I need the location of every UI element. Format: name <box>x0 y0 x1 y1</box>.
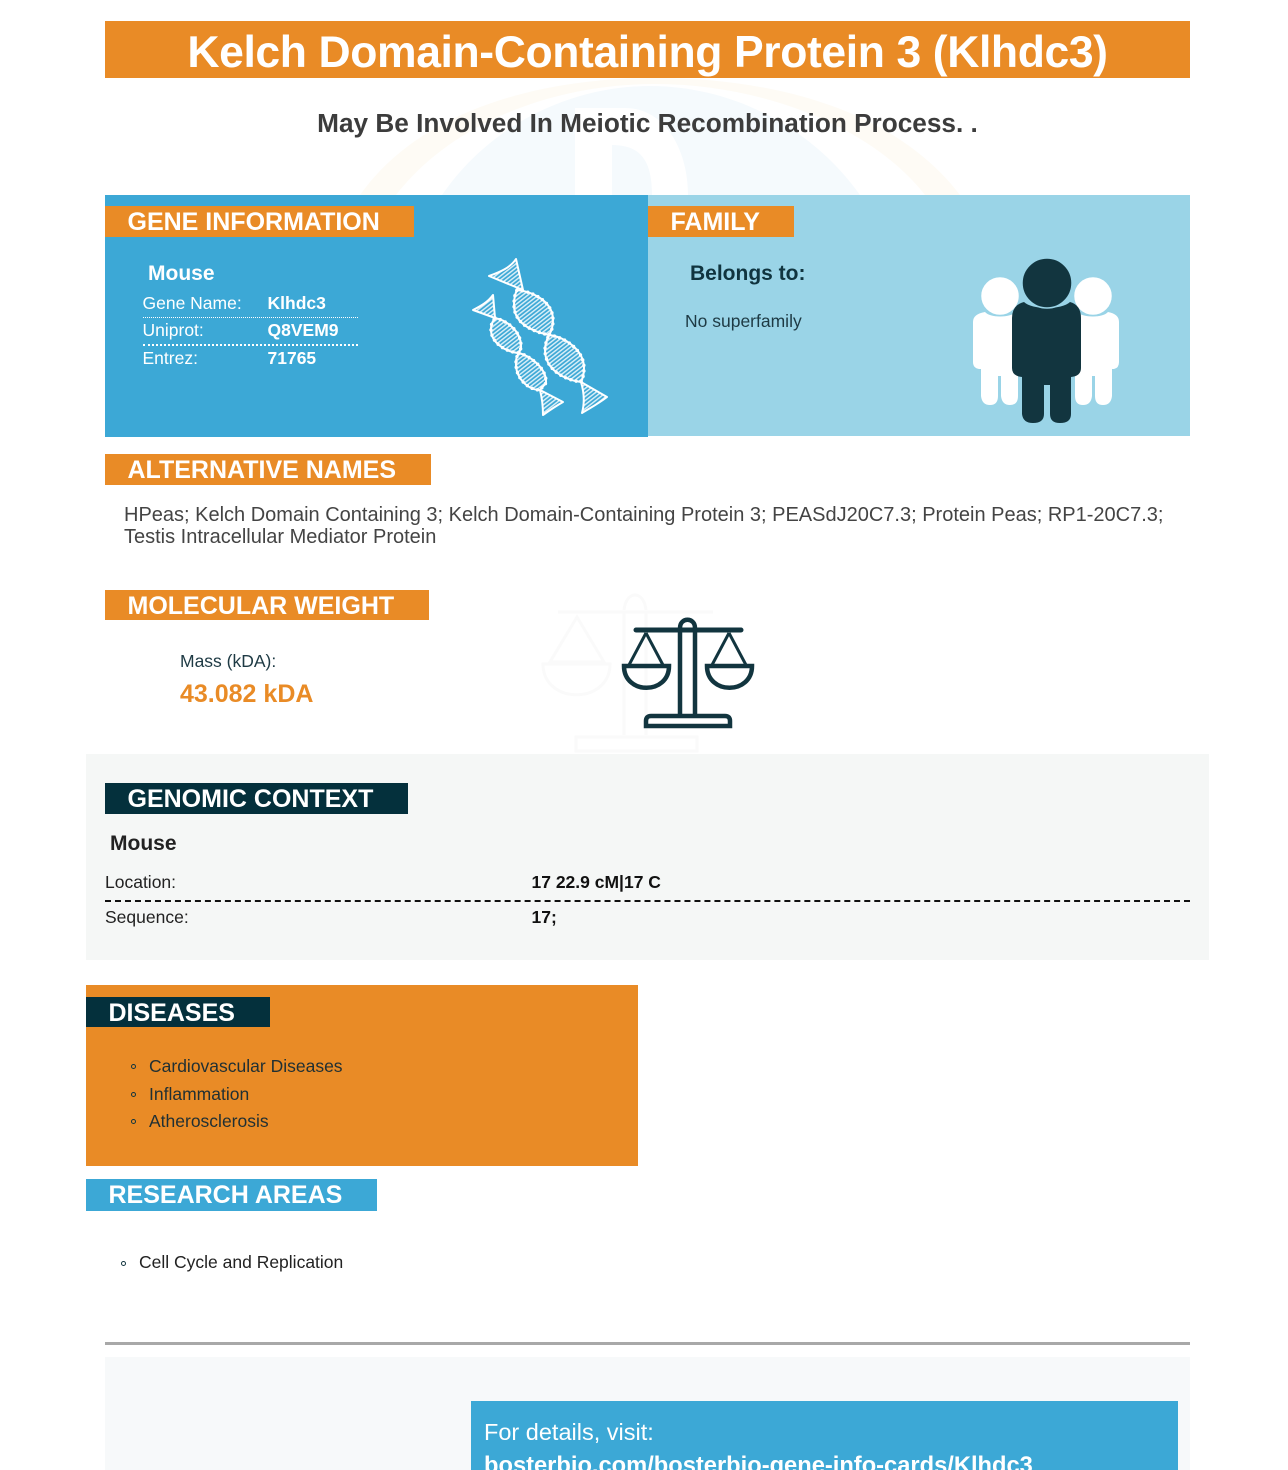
uniprot row: Uniprot: <box>142 320 204 340</box>
bullet marker <box>131 1092 136 1097</box>
mass label: Mass (kDA): <box>180 651 276 671</box>
bullet marker <box>131 1119 136 1124</box>
bullet marker <box>121 1261 126 1266</box>
heading: research areas: RESEARCH AREAS <box>108 1181 342 1209</box>
panel: diseases <box>86 985 638 1166</box>
bullet item: Atherosclerosis <box>149 1111 269 1131</box>
research area item: Cell Cycle and Replication <box>139 1252 343 1272</box>
alternative names text: Testis Intracellular Mediator Protein <box>124 526 436 548</box>
sequence row: 17; <box>532 907 557 927</box>
uniprot row: Q8VEM9 <box>268 320 338 340</box>
location row <box>105 871 1190 902</box>
entrez row <box>142 348 316 368</box>
uniprot row <box>142 319 358 346</box>
callout text: For details, visit: <box>484 1419 654 1445</box>
entrez row: Entrez: <box>142 348 198 368</box>
footer rule <box>105 1342 1190 1345</box>
heading: alternative names: ALTERNATIVE NAMES <box>128 456 396 484</box>
location row: Location: <box>105 872 176 892</box>
mass value: 43.082 kDA <box>180 680 313 708</box>
icon: family group <box>973 258 1119 423</box>
heading: genomic context: GENOMIC CONTEXT <box>128 785 373 813</box>
entrez row: 71765 <box>268 348 316 368</box>
callout: details link <box>471 1401 1178 1470</box>
panel: gene information <box>105 195 648 437</box>
species label: Mouse <box>110 832 177 855</box>
panel: footer <box>105 1357 1190 1470</box>
heading: family <box>648 206 794 237</box>
sequence row: Sequence: <box>105 907 189 927</box>
species label: Mouse <box>148 262 215 285</box>
gene name row <box>142 292 358 318</box>
belongs to label: Belongs to: <box>690 262 806 285</box>
location row: 17 22.9 cM|17 C <box>532 872 661 892</box>
subtitle: May Be Involved In Meiotic Recombination Process. . <box>317 108 978 138</box>
panel: family <box>648 195 1190 436</box>
heading: diseases <box>86 997 270 1027</box>
heading: molecular weight: MOLECULAR WEIGHT <box>128 592 394 620</box>
title banner: Kelch Domain-Containing Protein 3 (Klhdc3) <box>187 28 1108 77</box>
panel: genomic context <box>86 754 1209 960</box>
disease list <box>131 1056 343 1131</box>
bullet item: Inflammation <box>149 1084 249 1104</box>
gene name row: Klhdc3 <box>268 293 326 313</box>
heading: gene information: GENE INFORMATION <box>128 208 380 236</box>
icon: DNA strands <box>472 258 608 416</box>
gene name row: Gene Name: <box>142 293 242 313</box>
bullet item: Cardiovascular Diseases <box>149 1056 343 1076</box>
alternative names text: HPeas; Kelch Domain Containing 3; Kelch Domain-Containing Protein 3; PEASdJ20C7.3; Protein Peas; RP1-20C7.3; <box>124 504 1163 526</box>
sequence row <box>105 907 557 927</box>
heading: family: FAMILY <box>670 208 760 236</box>
bullet marker <box>131 1064 136 1069</box>
watermark: logo arcs <box>360 78 960 195</box>
icon: ghost scale watermark <box>535 590 720 755</box>
family value: No superfamily <box>685 311 802 331</box>
heading: diseases: DISEASES <box>108 999 235 1027</box>
icon: balance scale <box>622 618 754 728</box>
alternative names text <box>124 504 1163 548</box>
